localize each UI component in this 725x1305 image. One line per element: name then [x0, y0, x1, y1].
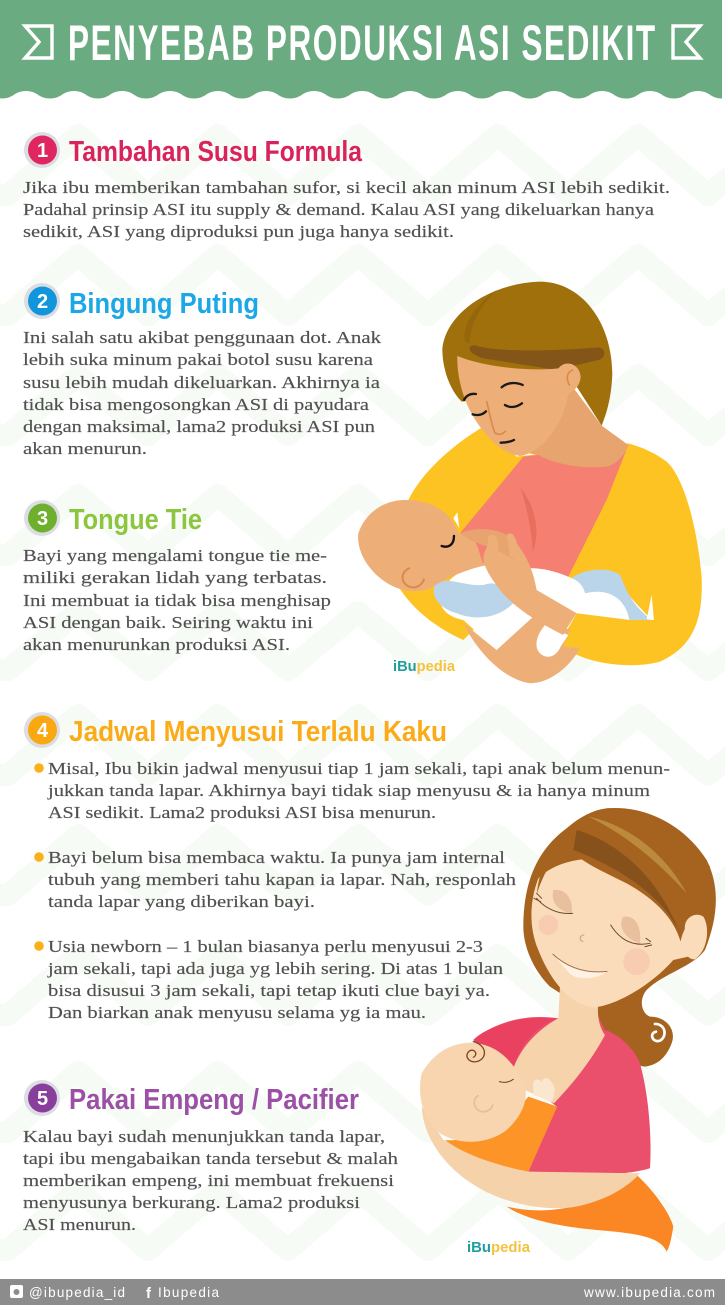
baby head: [420, 1043, 526, 1142]
text 5: [23, 1127, 399, 1234]
website: www.ibupedia.com: [583, 1285, 715, 1300]
hair light strand: [588, 817, 687, 893]
text 5: ASI menurun.: [23, 1215, 136, 1234]
badge 3: 3: [37, 508, 48, 530]
eyes and mouth: [534, 893, 652, 947]
lower forearm: [463, 617, 580, 683]
breast detail: [460, 529, 513, 560]
text 5: Kalau bayi sudah menunjukkan tanda lapar,: [23, 1127, 385, 1146]
arm holding baby: [483, 536, 577, 635]
neck: [510, 383, 628, 467]
text 5: tapi ibu mengabaikan tanda tersebut & malah: [23, 1149, 399, 1168]
text 3: Ini membuat ia tidak bisa menghisap: [23, 591, 331, 610]
text 3: miliki gerakan lidah yang terbatas.: [23, 568, 327, 587]
text 2: tidak bisa mengosongkan ASI di payudara: [23, 395, 370, 414]
text 2: [23, 328, 382, 458]
text 3: [23, 546, 331, 654]
bullet 2: Bayi belum bisa membaca waktu. Ia punya jam internal: [48, 848, 505, 867]
text 2: susu lebih mudah dikeluarkan. Akhirnya ia: [23, 373, 381, 392]
icon: facebook: f: [146, 1285, 152, 1302]
eyelids: [553, 890, 572, 913]
section 5: Pakai Empeng / Pacifier: [23, 1080, 399, 1234]
text 3: ASI dengan baik. Seiring waktu ini: [23, 613, 313, 632]
badge 4: [24, 712, 60, 748]
icon: right title bracket: [673, 26, 700, 58]
bullet 2: tubuh yang memberi tahu kapan ia lapar. Nah, responlah: [48, 870, 517, 889]
blanket fold over forearm: [536, 625, 568, 657]
bullet 3: Usia newborn – 1 bulan biasanya perlu menyusui 2-3: [48, 937, 483, 956]
bullet 3: Dan biarkan anak menyusu selama yg ia mau.: [48, 1003, 426, 1022]
bullet 2: [34, 848, 517, 911]
badge 3: [24, 500, 60, 536]
facial features: [464, 370, 573, 443]
hairband: [470, 345, 604, 370]
shirt: [460, 445, 628, 577]
icon: left title bracket: [25, 26, 52, 58]
text 2: dengan maksimal, lama2 produksi ASI pun: [23, 417, 376, 436]
text 1: Padahal prinsip ASI itu supply & demand. Kalau ASI yang dikeluarkan hanya: [23, 200, 655, 219]
badge 1: [24, 132, 60, 168]
text 2: lebih suka minum pakai botol susu karena: [23, 350, 374, 369]
chest and neck: [510, 987, 605, 1103]
arm: [422, 1107, 640, 1208]
illustration: mother in yellow cardigan nursing baby: [358, 282, 702, 683]
dark pink sleeve: [473, 1018, 557, 1080]
badge 1: 1: [37, 140, 48, 162]
orange cloth tail: [507, 1175, 673, 1252]
baby head: [358, 500, 487, 591]
bullet 3: bisa disusui 3 jam sekali, tapi tetap ikuti clue bayi ya.: [48, 981, 490, 1000]
text 5: memberikan empeng, ini membuat frekuensi: [23, 1171, 394, 1190]
bullet 1: jukkan tanda lapar. Akhirnya bayi tidak siap menyusu & ia hanya minum: [47, 781, 650, 800]
bullet 1: ASI sedikit. Lama2 produksi ASI bisa menurun.: [48, 803, 436, 822]
hair shadow: [464, 290, 497, 343]
heading 1: Tambahan Susu Formula: [69, 136, 363, 168]
hair fringe: [537, 808, 710, 942]
heading 5: Pakai Empeng / Pacifier: [69, 1084, 359, 1116]
facebook name: Ibupedia: [158, 1285, 219, 1300]
text 2: akan menurun.: [23, 439, 147, 458]
bullet 3: [34, 937, 504, 1022]
baby hand: [533, 1078, 555, 1102]
icon: instagram: [10, 1285, 23, 1298]
fingers: [487, 533, 525, 563]
logo ibupedia 1: iBupedia: [393, 658, 456, 675]
badge 5: [24, 1080, 60, 1116]
section 3: Tongue Tie: [23, 500, 331, 654]
text 5: menyusunya berkurang. Lama2 produksi: [23, 1193, 360, 1212]
top pink: [473, 1013, 651, 1175]
badge 2: 2: [37, 291, 48, 313]
baby body orange: [445, 1097, 557, 1172]
illustration: smiling mother in pink top nursing baby: [420, 808, 716, 1252]
cheeks: [538, 915, 558, 935]
ear: [684, 915, 707, 959]
bullet 3: jam sekali, tapi ada juga yg lebih sering. Di atas 1 bulan: [47, 959, 504, 978]
bullet 1: Misal, Ibu bikin jadwal menyusui tiap 1 jam sekali, tapi anak belum menun-: [48, 759, 670, 778]
hair back: [523, 808, 716, 1067]
footer bar: [0, 1279, 725, 1305]
curl detail: [652, 1024, 665, 1041]
section 1: Tambahan Susu Formula: [23, 132, 670, 241]
text 1: [23, 178, 670, 241]
text 3: Bayi yang mengalami tongue tie me-: [23, 546, 327, 565]
text 1: sedikit, ASI yang diproduksi pun juga hanya sedikit.: [23, 222, 454, 241]
hair: [442, 282, 612, 426]
white sliver of blanket: [647, 595, 654, 620]
baby features: [442, 536, 454, 547]
cardigan: [390, 427, 702, 665]
section 2: Bingung Puting: [23, 283, 382, 458]
baby features: [499, 1079, 513, 1082]
logo ibupedia 2: iBupedia: [467, 1239, 531, 1256]
bullet 1: [34, 759, 670, 822]
title: PENYEBAB PRODUKSI ASI SEDIKIT: [68, 15, 656, 71]
blanket: [440, 565, 652, 650]
face: [531, 859, 688, 1007]
face: [457, 356, 581, 456]
badge 5: 5: [37, 1088, 48, 1110]
text 3: akan menurunkan produksi ASI.: [23, 635, 290, 654]
hair dark strand: [573, 830, 682, 938]
instagram handle: @ibupedia_id: [29, 1285, 125, 1300]
blue lining: [434, 581, 513, 617]
section 4: Jadwal Menyusui Terlalu Kaku: [24, 712, 670, 1022]
text 2: Ini salah satu akibat penggunaan dot. Anak: [23, 328, 382, 347]
heading 4: Jadwal Menyusui Terlalu Kaku: [69, 716, 447, 748]
heading 3: Tongue Tie: [69, 504, 202, 536]
badge 2: [24, 283, 60, 319]
white tag top: [453, 512, 459, 528]
bullet 2: tanda lapar yang diberikan bayi.: [48, 892, 315, 911]
text 1: Jika ibu memberikan tambahan sufor, si kecil akan minum ASI lebih sedikit.: [23, 178, 670, 197]
heading 2: Bingung Puting: [69, 288, 259, 320]
shirt fold: [521, 488, 536, 552]
header banner: [0, 0, 722, 98]
badge 4: 4: [37, 720, 49, 742]
